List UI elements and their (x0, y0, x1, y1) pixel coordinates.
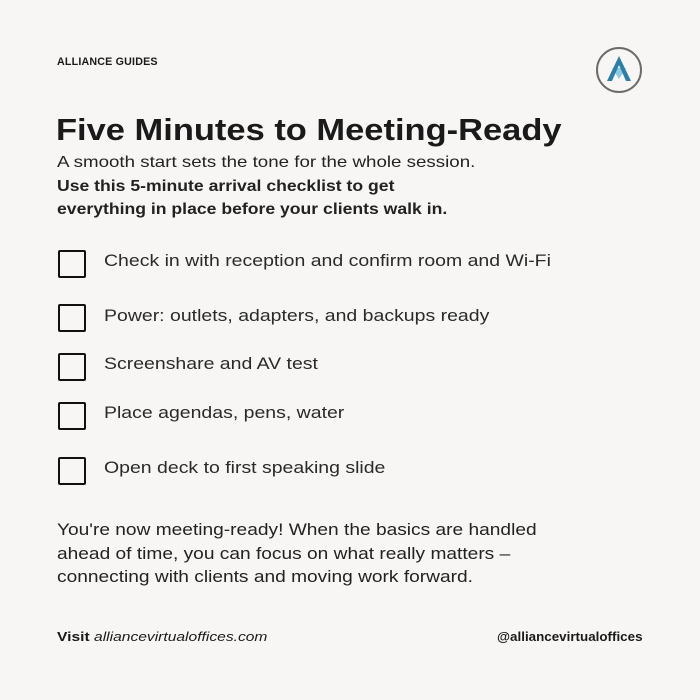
footer: website: Visit alliancevirtualoffices.com (57, 629, 267, 644)
checklist item 3 (58, 353, 318, 381)
icon: logo (596, 47, 642, 93)
footer: handle: @alliancevirtualoffices (497, 629, 643, 644)
checklist: Power: outlets, adapters, and backups ready (104, 307, 489, 325)
subtitle (57, 154, 475, 218)
checklist item 2 (58, 304, 490, 332)
brand label: ALLIANCE GUIDES (57, 56, 158, 68)
subtitle: A smooth start sets the tone for the whole session. (57, 154, 475, 171)
checklist: Check in with reception and confirm room and Wi-Fi (104, 252, 551, 270)
closing paragraph (57, 521, 537, 586)
title: Five Minutes to Meeting-Ready (56, 113, 562, 147)
closing paragraph: You're now meeting-ready! When the basics are handled (57, 521, 537, 539)
closing paragraph: ahead of time, you can focus on what really matters – (57, 544, 510, 562)
checklist item 1 (58, 250, 551, 278)
closing paragraph: connecting with clients and moving work forward. (57, 568, 473, 586)
checklist item 5 (58, 457, 385, 485)
checklist: Place agendas, pens, water (104, 404, 344, 422)
subtitle: everything in place before your clients walk in. (57, 201, 447, 218)
subtitle: Use this 5-minute arrival checklist to get (57, 178, 394, 194)
checklist item 4 (58, 402, 344, 430)
checklist (58, 250, 551, 485)
checklist: Open deck to first speaking slide (104, 459, 385, 477)
checklist: Screenshare and AV test (104, 355, 318, 373)
